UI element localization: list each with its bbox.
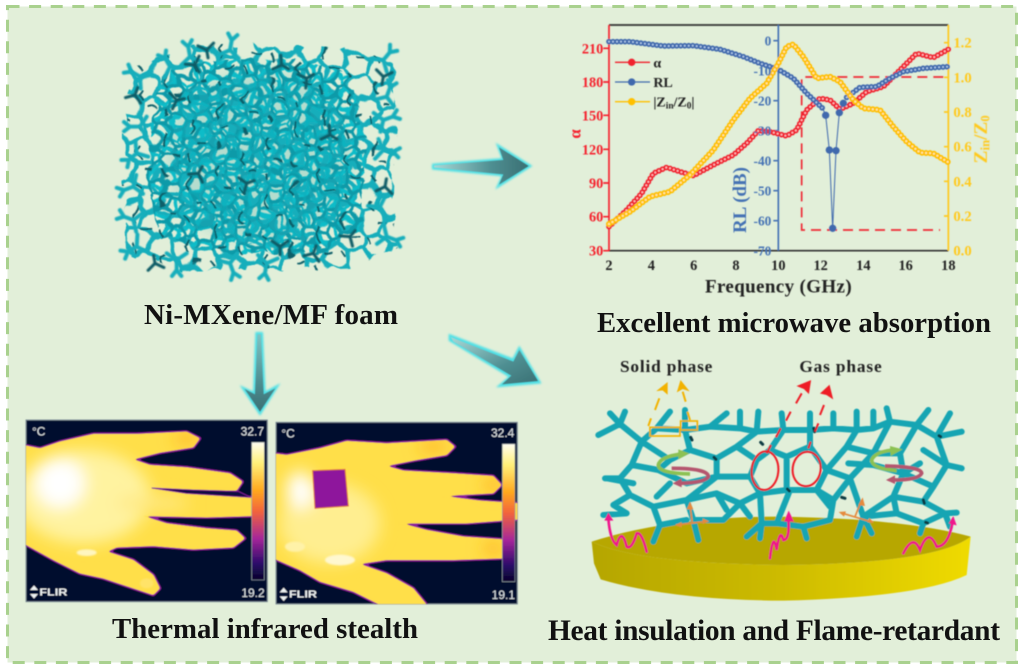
legend: RL — [653, 76, 673, 91]
left axis labels: 150 — [582, 108, 603, 124]
right axis labels: 0.2 — [953, 209, 972, 225]
colour scale — [252, 442, 264, 580]
left axis labels: 90 — [589, 176, 603, 192]
temperature labels: 32.4 — [491, 426, 515, 440]
label: foam: Ni-MXene/MF foam — [144, 299, 398, 331]
legend: |Z — [653, 96, 666, 111]
right axis labels: 1.0 — [953, 70, 972, 86]
chart: microwave absorption: 0 — [978, 115, 992, 122]
foam patch — [313, 469, 348, 508]
right axis labels: 0.4 — [953, 174, 972, 190]
x axis labels: 2 — [605, 258, 613, 274]
RL axis labels: -40 — [754, 153, 772, 168]
label: solid phase: Solid phase — [620, 357, 713, 376]
temperature labels: 32.7 — [241, 425, 264, 439]
arrow: foam to microwave absorption — [433, 146, 530, 186]
disc substrate — [592, 517, 971, 601]
FLIR logo — [30, 585, 68, 599]
foam network — [598, 408, 962, 542]
FLIR logo: FLIR — [39, 587, 68, 598]
x axis labels: 4 — [648, 258, 655, 274]
legend: /Z — [673, 96, 687, 111]
x axis labels: 14 — [856, 258, 870, 274]
FLIR logo — [280, 588, 318, 601]
left axis labels: 120 — [582, 142, 603, 158]
temperature labels: °C — [32, 424, 46, 438]
label: heat insulation: Heat insulation and Flame-retardant — [548, 615, 1000, 647]
right axis labels: 1.2 — [953, 36, 972, 52]
temperature labels — [32, 424, 265, 600]
RL axis labels: -30 — [754, 123, 772, 138]
left axis labels: 180 — [582, 75, 603, 91]
chart: microwave absorption: RL (dB) — [730, 167, 751, 233]
thermal image: bare hand — [17, 420, 267, 602]
label: gas phase: Gas phase — [799, 357, 882, 376]
hand shape — [273, 440, 520, 607]
temperature labels — [281, 426, 515, 602]
RL axis labels: 0 — [765, 33, 772, 48]
right axis labels: 0.6 — [953, 140, 972, 156]
label: thermal stealth: Thermal infrared stealth — [112, 613, 418, 645]
x axis labels: 10 — [771, 258, 785, 274]
orange axes — [675, 497, 874, 527]
arrow: foam to heat insulation — [450, 336, 539, 386]
left axis labels: 60 — [589, 210, 603, 226]
temperature labels: 19.2 — [241, 586, 265, 600]
curve: Zin/Z0 — [609, 44, 948, 224]
label: microwave absorption: Excellent microwave absorption — [597, 307, 991, 339]
chart: microwave absorption — [566, 25, 992, 297]
dashed highlight box — [802, 77, 943, 230]
x axis labels: 18 — [941, 258, 955, 274]
legend: | — [691, 96, 695, 111]
thermal image: hand with foam — [273, 422, 520, 607]
arrow: foam to thermal stealth — [243, 333, 277, 413]
left rotation arrows — [658, 449, 708, 487]
legend: α — [653, 56, 661, 71]
RL axis labels: -60 — [754, 213, 772, 228]
temperature labels: 19.1 — [492, 588, 515, 602]
x axis labels: 16 — [898, 258, 913, 274]
left axis labels — [582, 41, 603, 260]
curve: RL — [609, 42, 948, 232]
right axis labels: 0.0 — [953, 244, 972, 260]
RL axis labels: -20 — [754, 93, 772, 108]
chart: microwave absorption: Z — [971, 150, 992, 163]
right axis labels: 0.8 — [953, 105, 972, 121]
temperature labels: °C — [281, 427, 295, 441]
flame-retardant illustration — [592, 357, 971, 601]
x axis labels — [605, 258, 955, 274]
x axis labels: 8 — [732, 258, 740, 274]
foam structure illustration — [103, 33, 417, 282]
chart: microwave absorption: in — [978, 140, 992, 150]
left axis labels: 210 — [582, 41, 603, 57]
RL axis labels: -10 — [754, 63, 772, 78]
gas phase markers — [750, 381, 833, 491]
legend: 0 — [687, 102, 692, 112]
x axis labels: 6 — [690, 258, 697, 274]
RL axis labels — [754, 33, 772, 258]
chart: microwave absorption: α — [566, 129, 585, 139]
axes frame — [603, 25, 948, 251]
hand shape — [17, 432, 253, 595]
legend: in — [666, 102, 674, 112]
x axis labels: 12 — [814, 258, 828, 274]
RL axis labels: -70 — [754, 243, 772, 258]
colour scale — [502, 444, 515, 582]
heat waves — [604, 511, 957, 558]
solid phase markers — [648, 381, 697, 436]
right axis labels — [953, 36, 972, 260]
chart: microwave absorption: /Z — [971, 122, 992, 141]
legend — [615, 56, 695, 112]
curve: alpha — [609, 49, 948, 227]
RL axis labels: -50 — [754, 183, 772, 198]
axis titles: Frequency (GHz) — [705, 276, 852, 297]
right rotation arrows — [872, 446, 922, 484]
FLIR logo: FLIR — [289, 590, 318, 601]
left axis labels: 30 — [589, 244, 603, 260]
